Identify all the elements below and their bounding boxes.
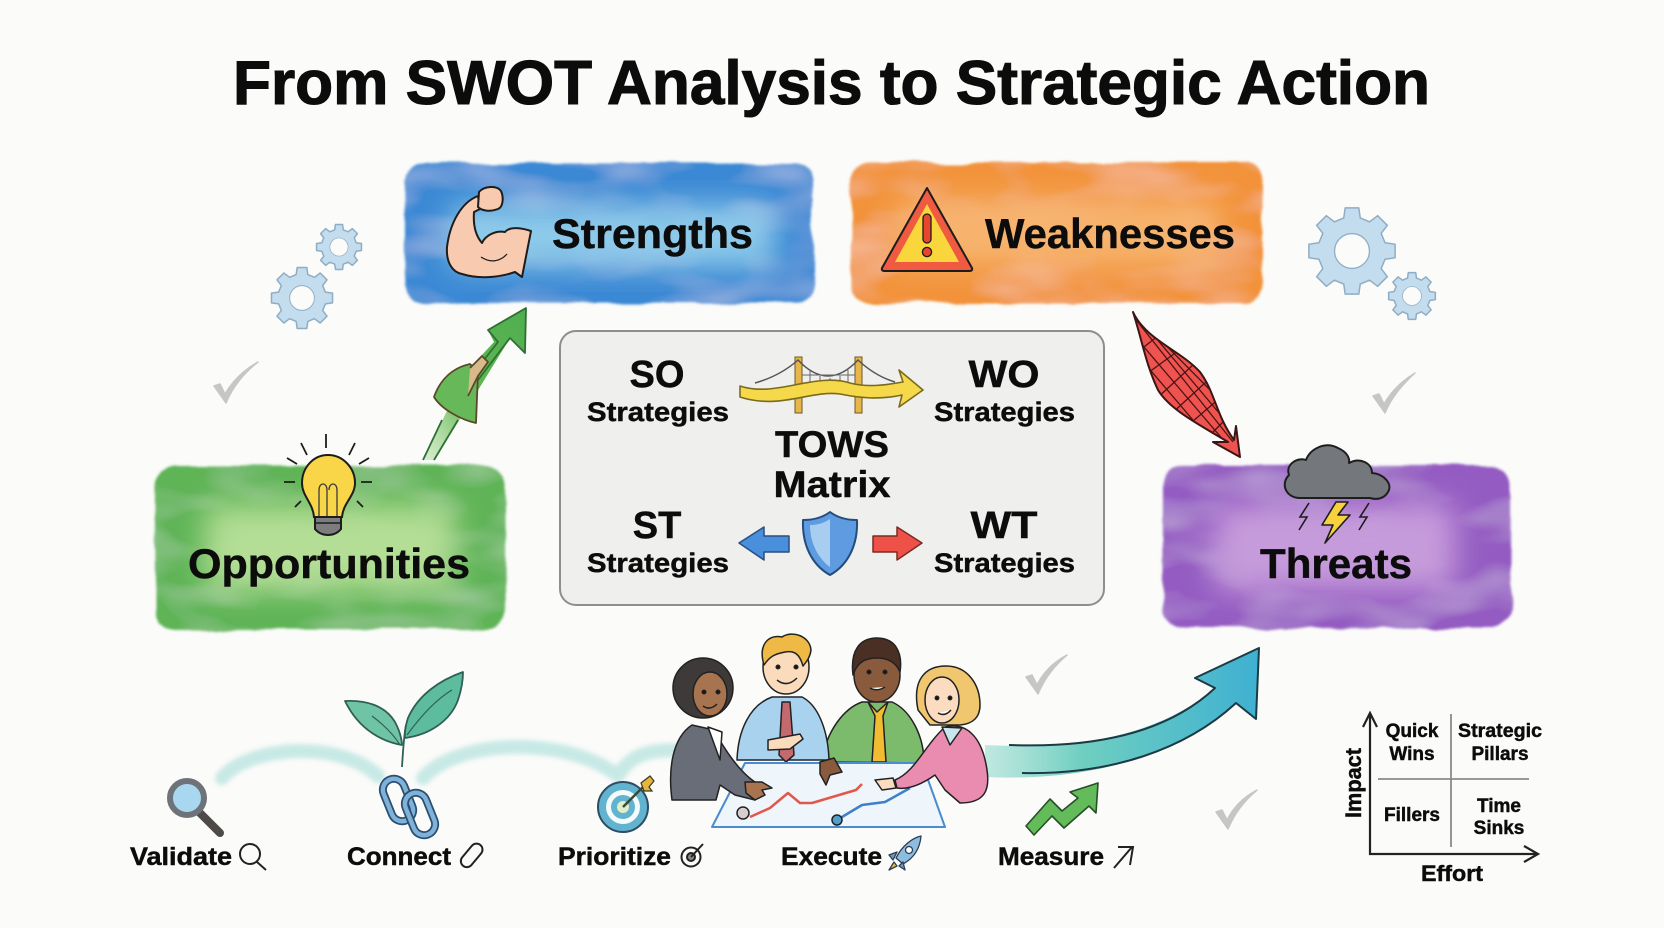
- icon: target: [598, 776, 654, 832]
- label: WT strategies: WT: [970, 505, 1038, 547]
- icon: drawstring bag: [434, 356, 488, 423]
- panel: TOWS matrix: [560, 331, 1104, 605]
- icon: sprout: [345, 672, 463, 767]
- label: SO strategies: [587, 354, 729, 427]
- label: TOWS Matrix: TOWS: [775, 424, 889, 465]
- label: WO strategies: WO: [968, 354, 1040, 396]
- quadrant: quick wins: Wins: [1389, 744, 1435, 765]
- panel: weaknesses: [851, 163, 1263, 303]
- panel: opportunities: [155, 434, 505, 629]
- quadrant: time sinks: Sinks: [1474, 818, 1524, 839]
- title: From SWOT Analysis to Strategic Action: [233, 49, 1430, 118]
- label: WO strategies: [934, 354, 1075, 427]
- person: man in green: [822, 638, 924, 763]
- icon: left arrow: [739, 527, 789, 560]
- check mark 1: [214, 362, 258, 403]
- icon: flexed arm: [447, 187, 531, 277]
- label: WT strategies: [934, 505, 1075, 578]
- check mark 4: [1216, 790, 1257, 829]
- wavy path behind steps: [222, 747, 680, 778]
- axes: [1363, 713, 1538, 862]
- label: ST strategies: ST: [633, 505, 681, 547]
- arrow: opportunities to strengths: [423, 308, 526, 460]
- heading: opportunities: Opportunities: [188, 540, 470, 587]
- chart: impact effort matrix: [1341, 713, 1542, 886]
- quadrant: time sinks: Time: [1477, 796, 1521, 817]
- icon: storm cloud: [1285, 445, 1389, 543]
- axis label: effort: Effort: [1421, 861, 1484, 886]
- label: ST strategies: Strategies: [587, 548, 729, 578]
- icon: gears left: [271, 225, 361, 329]
- icon: small trend arrow: [1114, 847, 1133, 868]
- quadrant: quick wins: [1386, 721, 1439, 765]
- person: blond man in blue: [737, 634, 829, 762]
- label: SO strategies: SO: [630, 354, 684, 396]
- step: execute: [781, 836, 921, 871]
- icon: chain: [380, 775, 438, 839]
- label: WO strategies: Strategies: [934, 397, 1075, 427]
- icon: light bulb: [284, 434, 372, 535]
- step: measure: [998, 783, 1133, 871]
- label: connect: Connect: [347, 843, 452, 871]
- icon: green zigzag arrow: [1026, 783, 1098, 835]
- heading: threats: Threats: [1260, 540, 1412, 587]
- icon: small link: [458, 841, 485, 870]
- icon: bridge arrow: [740, 357, 923, 413]
- icon: right arrow: [873, 527, 922, 560]
- heading: weaknesses: Weaknesses: [985, 210, 1235, 257]
- person: woman with dark hair: [671, 658, 772, 800]
- label: execute: Execute: [781, 843, 882, 871]
- arrow: weaknesses to threats (net): [1133, 312, 1240, 457]
- panel: threats: [1162, 445, 1511, 628]
- icon: magnifier: [170, 781, 220, 833]
- step: validate: [130, 781, 266, 871]
- map on table: [712, 763, 945, 827]
- quadrant: time sinks: [1474, 796, 1524, 839]
- check mark 2: [1373, 373, 1415, 413]
- label: measure: Measure: [998, 843, 1104, 871]
- arrow: growth to threats: [985, 648, 1259, 778]
- quadrant dividers: [1378, 714, 1529, 847]
- quadrant: strategic pillars: Strategic: [1458, 721, 1542, 742]
- step: prioritize: [558, 776, 703, 871]
- quadrant: fillers: Fillers: [1384, 805, 1440, 826]
- person: blonde woman in pink: [875, 666, 988, 803]
- icon: rocket: [889, 836, 921, 870]
- label: TOWS Matrix: [774, 424, 891, 505]
- label: WT strategies: Strategies: [934, 548, 1075, 578]
- icon: shield: [803, 512, 857, 575]
- quadrant: strategic pillars: Pillars: [1471, 744, 1529, 765]
- axis label: impact: Impact: [1341, 747, 1366, 818]
- label: prioritize: Prioritize: [558, 843, 671, 871]
- panel: strengths: [405, 163, 813, 303]
- icon: small target: [682, 844, 703, 866]
- icon: warning triangle: [882, 188, 972, 271]
- label: SO strategies: Strategies: [587, 397, 729, 427]
- label: ST strategies: [587, 505, 729, 578]
- icon: small magnifier: [240, 844, 266, 870]
- check mark 3: [1026, 655, 1067, 694]
- label: TOWS Matrix: Matrix: [774, 464, 891, 505]
- illustration: team around map: [671, 634, 988, 827]
- icon: gears right: [1309, 208, 1435, 319]
- step: connect: [347, 775, 485, 871]
- label: validate: Validate: [130, 843, 232, 871]
- heading: strengths: Strengths: [552, 210, 753, 257]
- hand: man in green pointing: [820, 758, 842, 785]
- quadrant: quick wins: Quick: [1386, 721, 1439, 742]
- quadrant: strategic pillars: [1458, 721, 1542, 765]
